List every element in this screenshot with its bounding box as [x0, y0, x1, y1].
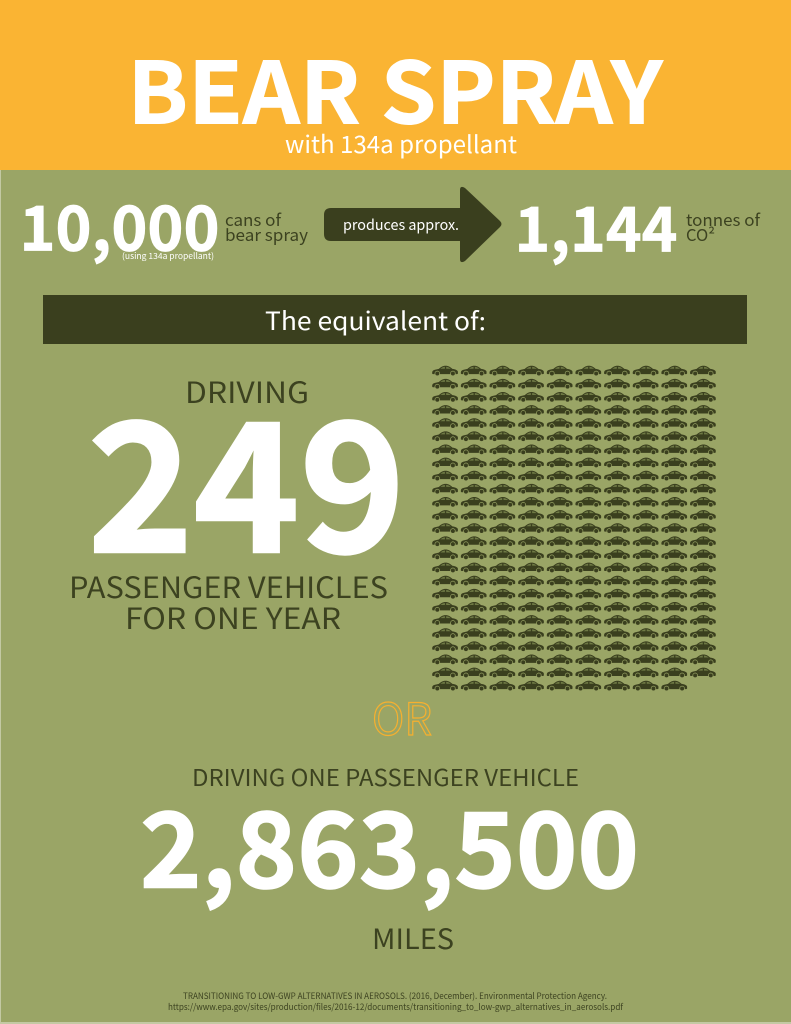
stat: 10,000 cans of bear spray: 10,000	[20, 178, 220, 268]
banner: the equivalent of: The equivalent of:	[265, 302, 486, 338]
stat: driving 249 passenger vehicles for one year: 249	[88, 344, 406, 604]
stat: 1,144 tonnes of CO2: tonnes of	[686, 207, 761, 231]
arrow: produces approx.: produces approx.	[343, 214, 459, 235]
banner: the equivalent of	[43, 295, 747, 344]
stat: 10,000 cans of bear spray: bear spray	[225, 222, 308, 246]
arrow: produces approx.	[324, 187, 502, 262]
stat: driving 249 passenger vehicles for one year: PASSENGER VEHICLES	[69, 565, 388, 607]
stat: driving 249 passenger vehicles for one year: FOR ONE YEAR	[125, 596, 341, 638]
header band	[0, 0, 791, 170]
stat: driving one passenger vehicle 2,863,500 miles: MILES	[372, 918, 454, 958]
stat: driving one passenger vehicle 2,863,500 miles: 2,863,500	[140, 766, 639, 918]
source citation: https://www.epa.gov/sites/production/files/2016-12/documents/transitioning_to_low-gwp_alternatives_in_aerosols.pdf	[168, 1000, 624, 1013]
stat: driving 249 passenger vehicles for one year: DRIVING	[185, 370, 309, 412]
stat: 10,000 cans of bear spray: (using 134a propellant)	[122, 250, 214, 262]
stat: 1,144 tonnes of CO2: 1,144	[514, 180, 678, 270]
stat: 10,000 cans of bear spray: cans of	[225, 207, 282, 231]
source citation	[168, 989, 624, 1013]
stat: 1,144 tonnes of CO2	[514, 180, 761, 270]
pictogram: 249 cars	[432, 366, 716, 691]
subtitle: with 134a propellant	[285, 125, 517, 160]
source citation: TRANSITIONING TO LOW-GWP ALTERNATIVES IN AEROSOLS. (2016, December). Environmental Protection Agency.	[183, 989, 607, 1002]
OR outlined: OR	[372, 684, 432, 748]
stat: 1,144 tonnes of CO2: CO²	[686, 222, 715, 246]
title: BEAR SPRAY	[128, 26, 663, 148]
stat: driving one passenger vehicle 2,863,500 miles: DRIVING ONE PASSENGER VEHICLE	[192, 759, 579, 793]
